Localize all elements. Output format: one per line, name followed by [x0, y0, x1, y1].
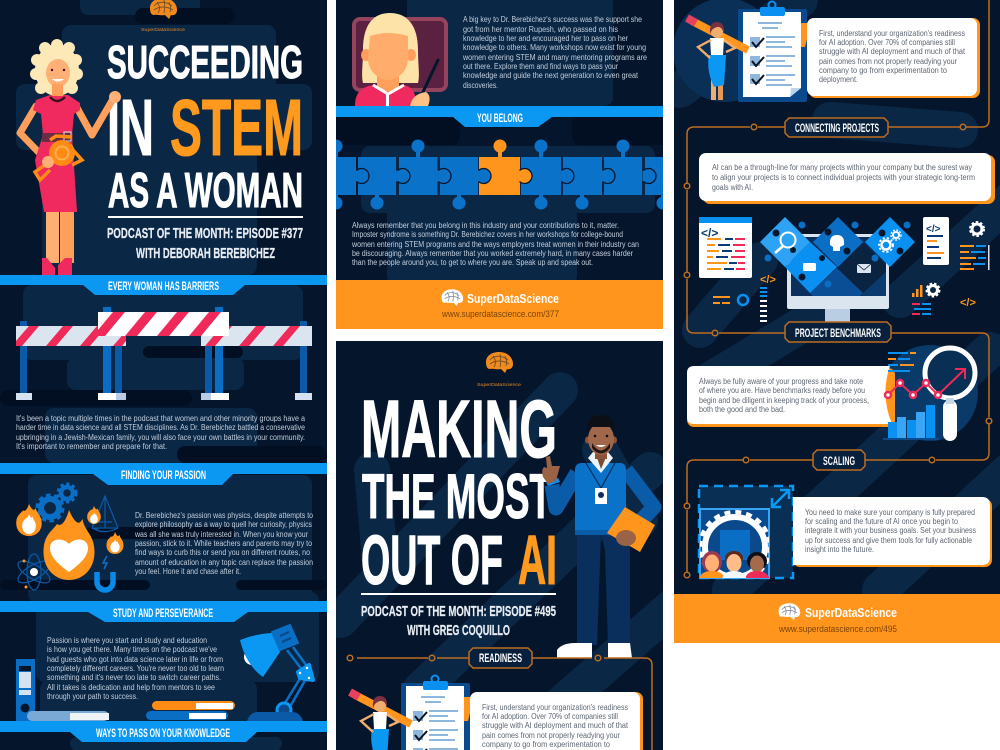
title: SUCCEEDING: [107, 36, 303, 88]
footer: superdatascience 377: www.superdatascience.com/377: [441, 309, 559, 319]
card: scaling: [793, 497, 992, 567]
card: readiness: struggle with AI deployment and much of that: [819, 47, 966, 56]
section header: you belong: YOU BELONG: [477, 113, 523, 125]
text block: mentor: knowledge and guide the next generation to even great: [463, 71, 639, 80]
title: WITH DEBORAH BEREBICHEZ: [136, 246, 275, 262]
logo: brain: SuperDataScience: [141, 27, 186, 32]
card: readiness: First, understand your organization's readiness: [482, 703, 628, 712]
card: connecting projects: AI can be a through-line for many projects within your company but the surest way: [712, 163, 972, 172]
section label: scaling: [813, 450, 865, 470]
logo: brain: SuperDataScience: [477, 382, 522, 387]
card: readiness: deployment.: [819, 75, 858, 84]
text block: mentor: women entering STEM and many mentoring programs are: [462, 53, 647, 62]
card: scaling: for scaling and the future of AI once you begin to: [805, 517, 958, 526]
section header: study and perseverance: [0, 601, 327, 622]
text block: passion: was all she was truly interested in. When you know your: [134, 530, 308, 539]
illustration: code window: </>: [701, 226, 718, 240]
card: readiness: First, understand your organization's readiness: [819, 29, 965, 38]
text block: study: through your path to success.: [47, 692, 138, 701]
card: readiness: [807, 18, 980, 98]
illustration: woman with pencil and clipboard: [687, 2, 811, 102]
illustration: man with folder: [542, 415, 655, 658]
icons: small code tags, charts and gear: </>: [960, 297, 976, 309]
text block: study: All it takes is dedication and help from mentors to see: [47, 683, 215, 692]
section label: project benchmarks: PROJECT BENCHMARKS: [795, 328, 881, 340]
title: WITH GREG COQUILLO: [407, 622, 510, 639]
illustration: flaming heart with science icons: [15, 484, 123, 590]
text block: mentor: knowledge to her and encouraged her to pass on her: [463, 34, 628, 43]
card: project benchmarks: Always be fully aware of your progress and take note: [699, 377, 863, 386]
title: OUT OF: [361, 521, 503, 599]
section header: ways to pass on your knowledge: [0, 721, 327, 742]
logo: brain: [141, 0, 186, 32]
section header: every woman has barriers: EVERY WOMAN HAS BARRIERS: [108, 281, 219, 293]
logo: brain: [477, 352, 522, 387]
text block: mentor: got from her mentor Rupesh, who passed on his: [463, 25, 618, 34]
text block: mentor: [462, 15, 647, 90]
illustration: monitor with puzzle pieces: [760, 217, 915, 322]
card: project benchmarks: of where you are. Have benchmarks ready before you: [699, 386, 865, 395]
section label: readiness: READINESS: [479, 653, 522, 665]
text block: barriers: harder time in data science and all STEM disciplines. As Dr. Berebichez battled a conservative: [16, 423, 305, 432]
text block: study: something and it's never too late to switch career paths.: [47, 673, 221, 682]
title: STEM: [170, 83, 303, 172]
illustration: woman with trophy: [20, 39, 121, 275]
icons: small code tags, charts and gear: </>: [760, 274, 776, 286]
text block: you belong: [351, 221, 639, 267]
text block: study: had guests who got into data science later in life or from: [47, 655, 223, 664]
panel: you belong: [330, 0, 672, 329]
card: connecting projects: to align your projects is to connect individual projects with your strategic long-term: [712, 173, 975, 182]
card: project benchmarks: [687, 366, 895, 427]
title: [361, 384, 557, 639]
text block: barriers: It's been a topic multiple times in the podcast that women and other minority groups have a: [16, 414, 305, 423]
illustration: right code cards and gears: </>: [926, 224, 941, 235]
section header: finding your passion: FINDING YOUR PASSION: [121, 470, 206, 482]
footer: superdatascience 377: SuperDataScience: [467, 291, 559, 306]
card: readiness: company to go from experimentation to: [482, 740, 610, 749]
card: readiness: company to go from experimentation to: [819, 66, 947, 75]
card: readiness: for AI adoption. Over 70% of companies still: [482, 712, 618, 721]
card: project benchmarks: begin and be diligent in keeping track of your process,: [699, 396, 869, 405]
text block: mentor: knowledge to others. Many workshops now exist for young: [463, 43, 646, 52]
footer: superdatascience 495: www.superdatascience.com/495: [778, 624, 897, 634]
card: connecting projects: [699, 153, 995, 204]
text block: you belong: be discouraging. Always remember that you worked extremely hard, in many cases harder: [352, 249, 633, 258]
text block: you belong: women entering STEM programs and the ways employers treat women in their industry can: [351, 240, 639, 249]
illustration: clipboard copy: [350, 676, 474, 750]
section label: readiness: [469, 648, 532, 668]
text block: you belong: Imposter syndrome is something Dr. Berebichez covers in her workshops for college-bound: [352, 230, 623, 239]
text block: passion: explore philosophy as a way to quell her curiosity, physics: [135, 520, 312, 529]
text block: you belong: than the people around you, to get to where you are. Speak up and speak out.: [352, 258, 593, 267]
text block: mentor: A big key to Dr. Berebichez's success was the support she: [463, 15, 642, 24]
illustration: scaling box with team: [699, 486, 793, 582]
illustration: jigsaw puzzle row: [330, 140, 670, 210]
illustration: striped barriers: [16, 307, 312, 400]
illustration: magnifier and charts: [883, 348, 975, 441]
card: scaling: You need to make sure your company is fully prepared: [805, 508, 975, 517]
text block: passion: find ways to curb this or send you on different routes, no: [135, 548, 310, 557]
card: connecting projects: goals with AI.: [712, 183, 753, 192]
card: readiness: pain comes from not properly readying your: [482, 731, 620, 740]
text block: passion: [134, 511, 313, 576]
title: PODCAST OF THE MONTH: EPISODE #495: [361, 603, 556, 620]
text block: passion: amount of education in any topic can replace the passion: [135, 558, 313, 567]
section header: finding your passion: [0, 463, 327, 485]
card: readiness: struggle with AI deployment and much of that: [482, 721, 629, 730]
text block: mentor: out there. Explore them and find ways to pass your: [463, 62, 618, 71]
text block: you belong: Always remember that you belong in this industry and your contributions to it, matter.: [352, 221, 619, 230]
panel: succeeding in STEM as a woman: [0, 0, 327, 750]
section label: connecting projects: CONNECTING PROJECTS: [795, 123, 879, 135]
illustration: chart circle backdrop: [882, 345, 978, 441]
title: MAKING: [361, 384, 557, 475]
footer: superdatascience 495: [674, 594, 1000, 643]
connector: readiness: [347, 655, 652, 750]
illustration: code window: [699, 217, 752, 278]
text block: study: is how you get there. Many times on the podcast we've: [47, 645, 217, 654]
illustration: binder and books: [16, 659, 235, 722]
card: readiness: [470, 692, 643, 750]
text block: barriers: [16, 414, 305, 451]
text block: study: Passion is where you start and study and education: [47, 636, 207, 645]
text block: mentor: discoveries.: [463, 81, 498, 90]
section label: project benchmarks: [785, 322, 891, 342]
text block: barriers: It's important to remember and prepare for that.: [16, 442, 167, 451]
text block: passion: passion, stick to it. While teachers and parents may try to: [135, 539, 312, 548]
card: scaling: integrate it with your business goals. Set your business: [805, 526, 976, 535]
section header: every woman has barriers: [0, 275, 327, 295]
section header: you belong: [336, 106, 663, 127]
section header: ways to pass on your knowledge: WAYS TO PASS ON YOUR KNOWLEDGE: [96, 728, 230, 740]
card: readiness: for AI adoption. Over 70% of companies still: [819, 38, 955, 47]
footer: superdatascience 495: SuperDataScience: [805, 605, 897, 620]
title: AI: [518, 521, 557, 599]
card: readiness: pain comes from not properly readying your: [819, 57, 957, 66]
panel: AI infographic continued: [673, 0, 1000, 643]
illustration: desk lamp: [240, 625, 313, 721]
card: scaling: up for success and give them tools for fully actionable: [805, 536, 972, 545]
panel: making the most out of AI: [336, 341, 680, 750]
text block: study: [47, 636, 224, 701]
title: PODCAST OF THE MONTH: EPISODE #377: [107, 226, 303, 242]
section header: study and perseverance: STUDY AND PERSEVERANCE: [113, 608, 213, 620]
illustration: teacher at board: [354, 13, 446, 106]
card: scaling: insight into the future.: [805, 545, 874, 554]
footer: superdatascience 377: [336, 280, 663, 329]
text block: barriers: upbringing in a Jewish-Mexican family, you will also face your own battles in your community.: [16, 433, 305, 442]
title: AS A WOMAN: [108, 164, 303, 218]
connectors: [684, 0, 992, 578]
section label: scaling: SCALING: [823, 456, 855, 468]
text block: passion: Dr. Berebichez's passion was physics, despite attempts to: [135, 511, 313, 520]
title: THE MOST: [362, 462, 552, 532]
card: project benchmarks: both the good and the bad.: [699, 405, 785, 414]
section label: connecting projects: [785, 118, 888, 137]
illustration: right code cards and gears: [923, 217, 990, 270]
title: [107, 36, 303, 262]
text block: study: completely different careers. You're never too old to learn: [47, 664, 224, 673]
text block: passion: you feel. Hone it and chase after it.: [135, 567, 241, 576]
title: IN: [107, 83, 154, 172]
icons: small code tags, charts and gear: [713, 274, 976, 322]
